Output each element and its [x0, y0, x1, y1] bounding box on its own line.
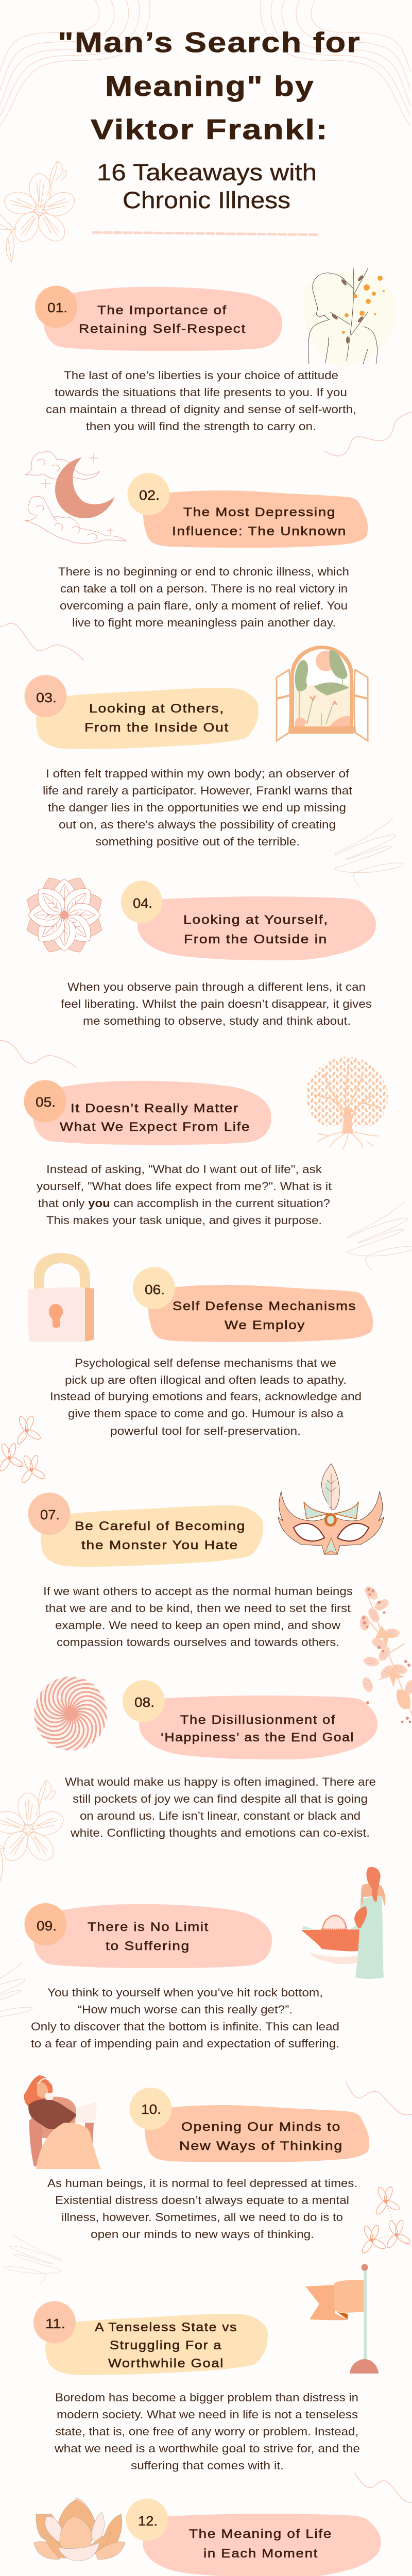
- panel: takeaway 03: [25, 646, 368, 848]
- heading 06: We Employ: [225, 1318, 305, 1332]
- decorative line curtain, top right: [261, 0, 410, 126]
- heading blob 06: [148, 1285, 373, 1342]
- number badge 09: [25, 1903, 67, 1945]
- heading 01: The Importance of: [97, 303, 227, 317]
- heading 11: A Tenseless State vs: [95, 2320, 237, 2334]
- panel: takeaway 05: [24, 1057, 388, 1227]
- heading 11: Struggling For a: [110, 2338, 222, 2352]
- heading 07: [75, 1519, 246, 1552]
- number 05: 05.: [36, 1094, 56, 1110]
- body text 02: There is no beginning or end to chronic illness, which: [58, 565, 349, 578]
- number 04: 04.: [133, 895, 152, 911]
- body text 02: overcoming a pain flare, only a moment of relief. You: [60, 599, 348, 612]
- heading 02: The Most Depressing: [183, 505, 336, 519]
- body text 04: [61, 980, 372, 1027]
- number badge 07: [28, 1493, 70, 1535]
- body text 03: out on, as there's always the possibility of creating: [59, 818, 336, 831]
- body text 11: modern society. What we need in life is not a tenseless: [57, 2408, 358, 2421]
- icon: flag on pole: [305, 2264, 379, 2374]
- body text 11: what we need is a worthwhile goal to strive for, and the: [54, 2442, 360, 2455]
- title: [58, 26, 361, 145]
- subtitle: [97, 159, 317, 213]
- icon: line-art flower beside subtitle: [0, 161, 78, 262]
- heading 05: [60, 1101, 250, 1134]
- body text 11: Boredom has become a bigger problem than distress in: [55, 2391, 358, 2404]
- heading 02: [172, 505, 347, 538]
- heading blob 05: [33, 1081, 271, 1145]
- number 10: 10.: [141, 2102, 161, 2117]
- heading 10: [179, 2120, 343, 2153]
- panel: takeaway 06: [28, 1253, 373, 1437]
- number 03: 03.: [36, 690, 57, 705]
- body text 08: [65, 1775, 376, 1839]
- body text 08: white. Conflicting thoughts and emotions can co-exist.: [70, 1826, 370, 1839]
- number 11: 11.: [45, 2316, 65, 2331]
- body text 06: [50, 1357, 362, 1437]
- body text 08: still pockets of joy we can find despite all that is going: [73, 1792, 368, 1805]
- body text 07: example. We need to keep an open mind, and show: [55, 1619, 341, 1632]
- heading 10: Opening Our Minds to: [181, 2120, 341, 2134]
- number badge 12: [126, 2499, 168, 2541]
- heading 07: the Monster You Hate: [81, 1538, 238, 1552]
- body text 08: What would make us happy is often imagined. There are: [65, 1775, 376, 1788]
- heading 02: Influence: The Unknown: [172, 524, 347, 538]
- body text 03: I often felt trapped within my own body; an observer of: [46, 767, 350, 780]
- number badge 01: [35, 285, 77, 328]
- heading 05: It Doesn’t Really Matter: [71, 1101, 239, 1115]
- number badge 04: [121, 881, 162, 923]
- panel: takeaway 08: [29, 1672, 377, 1839]
- body text 10: Existential distress doesn’t always equate to a mental: [55, 2194, 349, 2207]
- body text 07: If we want others to accept as the normal human beings: [43, 1585, 353, 1598]
- title: "Man’s Search for: [58, 26, 361, 58]
- panel: takeaway 04: [21, 872, 376, 1027]
- heading 09: [88, 1920, 209, 1953]
- heading blob 07: [41, 1505, 263, 1567]
- body text 02: can take a toll on a person. There is no real victory in: [60, 582, 348, 595]
- heading 09: to Suffering: [106, 1939, 190, 1953]
- heading blob 04: [138, 896, 376, 960]
- heading 05: What We Expect From Life: [60, 1120, 250, 1134]
- heading 01: [79, 303, 246, 336]
- body text 11: suffering that comes with it.: [131, 2459, 284, 2472]
- body text 02: live to fight more meaningless pain another day.: [72, 616, 336, 629]
- body text 10: As human beings, it is normal to feel depressed at times.: [47, 2177, 357, 2190]
- heading 12: The Meaning of Life: [189, 2527, 332, 2541]
- heading blob 02: [143, 490, 368, 548]
- heading blob 03: [36, 688, 259, 749]
- body text 08: on around us. Life isn’t linear, constant or black and: [80, 1809, 360, 1822]
- body text 04: feel liberating. Whilst the pain doesn’t disappear, it gives: [61, 997, 372, 1010]
- heading 06: [173, 1299, 356, 1332]
- body text 01: [46, 369, 356, 433]
- heading 11: [95, 2320, 237, 2370]
- body text 01: The last of one’s liberties is your choice of attitude: [64, 369, 338, 382]
- icon: small outlined flowers, right: [360, 2186, 412, 2255]
- number badge 06: [133, 1267, 175, 1309]
- body text 11: state, that is, one free of any worry or problem. Instead,: [55, 2425, 358, 2438]
- number 01: 01.: [47, 300, 67, 315]
- number 07: 07.: [40, 1507, 60, 1522]
- heading 03: Looking at Others,: [89, 702, 225, 716]
- icon: mandala: [21, 872, 108, 958]
- body text 01: then you will find the strength to carry on.: [86, 420, 316, 433]
- body text 04: me something to observe, study and think about.: [83, 1014, 351, 1027]
- body text 07: compassion towards ourselves and towards others.: [57, 1636, 339, 1649]
- body text 09: “How much worse can this really get?”.: [78, 2003, 293, 2016]
- panel: takeaway 02: [25, 451, 368, 629]
- heading 12: in Each Moment: [203, 2547, 318, 2561]
- heading 04: [183, 913, 329, 946]
- panel: takeaway 10: [24, 2075, 369, 2241]
- body text 06: powerful tool for self-preservation.: [110, 1425, 301, 1437]
- panel: takeaway 09: [25, 1867, 385, 2050]
- body text 05: that only you can accomplish in the current situation?: [38, 1197, 330, 1210]
- icon: tree with roots: [306, 1057, 388, 1149]
- heading 06: Self Defense Mechanisms: [173, 1299, 356, 1313]
- icon: woman overlooking the sea at sunset: [301, 1867, 385, 1979]
- body text 03: [43, 767, 353, 848]
- heading 10: New Ways of Thinking: [179, 2139, 343, 2153]
- icon: open arched window: [277, 646, 368, 741]
- heading 09: There is No Limit: [88, 1920, 209, 1934]
- icon: hypnotic spiral: [34, 1676, 107, 1751]
- heading blob 01: [44, 287, 282, 351]
- body text 03: the danger lies in the opportunities we end up missing: [48, 801, 346, 814]
- number 02: 02.: [139, 487, 160, 503]
- number badge 02: [128, 473, 170, 515]
- heading blob 11: [45, 2314, 268, 2375]
- title: Viktor Frankl:: [91, 113, 329, 145]
- body text 09: Only to discover that the bottom is infinite. This can lead: [31, 2020, 339, 2033]
- body text 05: Instead of asking, "What do I want out of life", ask: [46, 1163, 322, 1176]
- heading 08: The Disillusionment of: [180, 1713, 336, 1727]
- heading 08: [161, 1713, 354, 1744]
- body text 05: yourself, "What does life expect from me?". What is it: [37, 1180, 332, 1193]
- icon: line-art flower, left edge: [0, 1780, 66, 1882]
- heading blob 12: [143, 2514, 381, 2576]
- number badge 05: [24, 1080, 66, 1122]
- heading 01: Retaining Self-Respect: [79, 322, 246, 336]
- icon: crescent moon and clouds: [25, 451, 126, 544]
- number badge 03: [25, 675, 67, 717]
- body text 03: life and rarely a participator. However, Frankl warns that: [43, 784, 353, 797]
- body text 09: You think to yourself when you’ve hit rock bottom,: [47, 1986, 323, 1999]
- subtitle: 16 Takeaways with: [97, 159, 317, 185]
- icon: carnival mask with feather: [278, 1464, 384, 1554]
- heading blob 10: [145, 2105, 369, 2162]
- number badge 10: [130, 2088, 172, 2130]
- heading 03: [84, 702, 229, 735]
- body text 06: pick up are often illogical and often leads to apathy.: [65, 1374, 347, 1386]
- title: Meaning" by: [105, 70, 315, 102]
- icon: floral branch, right edge: [360, 1584, 412, 1723]
- number 12: 12.: [138, 2513, 158, 2529]
- icon: lotus flower: [34, 2498, 125, 2561]
- heading 03: From the Inside Out: [84, 721, 229, 735]
- body text 03: something positive out of the terrible.: [95, 835, 300, 848]
- body text 10: illness, however. Sometimes, all we need to do is to: [61, 2211, 343, 2224]
- body text 06: Instead of burying emotions and fears, acknowledge and: [50, 1390, 362, 1403]
- body text 05: [37, 1163, 332, 1227]
- number badge 11: [33, 2301, 76, 2343]
- icon: woman with flowers line art: [304, 268, 397, 367]
- panel: takeaway 07: [28, 1464, 384, 1649]
- icon: woman with tea in armchair: [24, 2075, 101, 2169]
- heading 04: From the Outside in: [184, 933, 328, 946]
- body text 11: [54, 2391, 360, 2472]
- heading 12: [189, 2527, 332, 2561]
- subtitle: Chronic Illness: [123, 187, 290, 213]
- panel: takeaway 11: [33, 2264, 379, 2472]
- number badge 08: [123, 1680, 165, 1722]
- body text 01: can maintain a thread of dignity and sense of self-worth,: [46, 403, 356, 416]
- number 08: 08.: [134, 1694, 154, 1710]
- heading 07: Be Careful of Becoming: [75, 1519, 246, 1533]
- body text 01: towards the situations that life presents to you. If you: [55, 386, 347, 399]
- icon: small outlined flowers: [0, 1415, 46, 1484]
- heading 11: Worthwhile Goal: [108, 2357, 224, 2370]
- body text 07: that we are and to be kind, then we need to set the first: [45, 1602, 351, 1615]
- heading blob 09: [33, 1904, 272, 1968]
- body text 09: [31, 1986, 339, 2050]
- heading 04: Looking at Yourself,: [183, 913, 329, 927]
- panel: takeaway 01: [35, 268, 397, 433]
- number 06: 06.: [145, 1282, 165, 1297]
- decorative line curtain, top left: [0, 0, 150, 126]
- panel: takeaway 12: [34, 2498, 381, 2576]
- body text 09: to a fear of impending pain and expectation of suffering.: [31, 2037, 339, 2050]
- body text 07: [43, 1585, 353, 1649]
- heading 08: ‘Happiness’ as the End Goal: [161, 1731, 354, 1744]
- body text 02: [58, 565, 349, 629]
- body text 10: open our minds to new ways of thinking.: [91, 2228, 314, 2241]
- body text 06: give them space to come and go. Humour is also a: [68, 1407, 344, 1420]
- body text 06: Psychological self defense mechanisms that we: [75, 1357, 336, 1369]
- heading blob 08: [139, 1696, 377, 1759]
- body text 05: This makes your task unique, and gives it purpose.: [46, 1214, 322, 1227]
- icon: padlock: [28, 1253, 94, 1342]
- body text 10: [47, 2177, 357, 2241]
- number 09: 09.: [37, 1918, 57, 1934]
- body text 04: When you observe pain through a different lens, it can: [67, 980, 366, 993]
